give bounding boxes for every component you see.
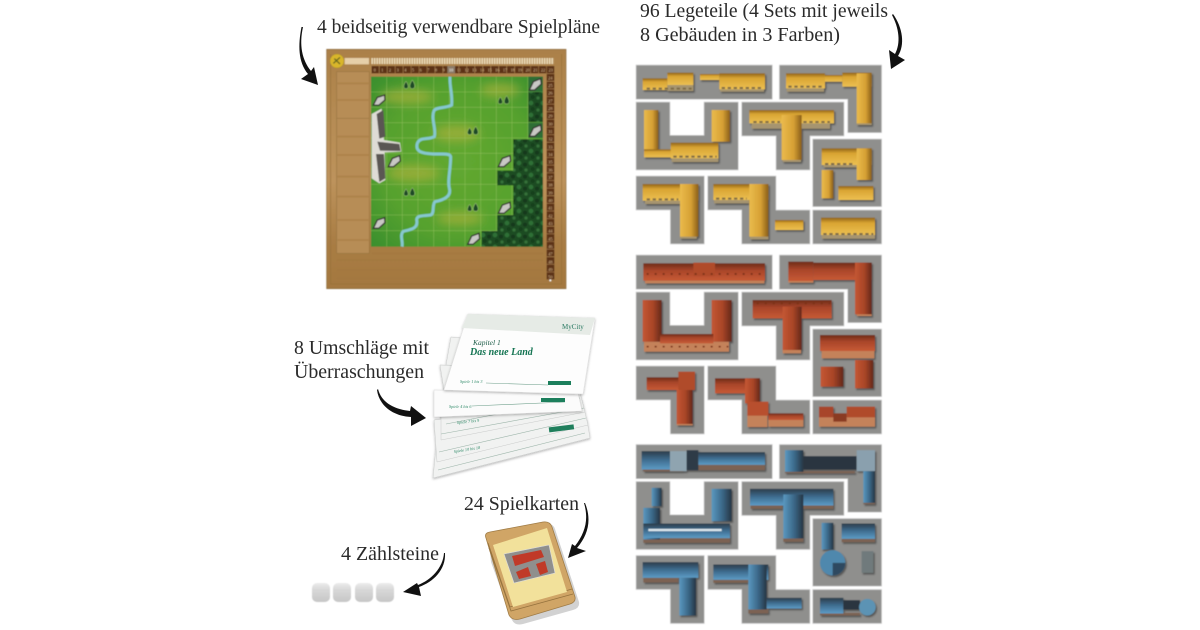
number track top: 19 [518, 67, 522, 72]
number track top: 23 [549, 67, 553, 72]
number track top: 14 [480, 67, 485, 72]
card deck [486, 522, 579, 624]
trees [404, 80, 509, 211]
number track right: 49 [548, 267, 552, 272]
number track right: 24 [548, 75, 553, 80]
tile set: blue buildings [636, 444, 882, 623]
number track top: 8 [435, 67, 437, 72]
lower text labels [453, 418, 481, 454]
mountains [372, 109, 401, 183]
number track top: 10 [449, 67, 453, 72]
arrow: to tiles [889, 14, 905, 69]
number track right: 34 [548, 152, 553, 157]
number track right: 39 [548, 190, 552, 195]
green skyline lower [549, 424, 574, 432]
number track right: 42 [548, 213, 552, 218]
rocks [373, 79, 541, 244]
number track right: 46 [548, 244, 553, 249]
number track top: 11 [457, 67, 461, 72]
number track top: 7 [427, 67, 430, 72]
number track right: 38 [548, 183, 552, 188]
label: envelopes line 1: 8 Umschläge mit [294, 338, 430, 359]
number track top: 3 [397, 67, 399, 72]
top envelope [444, 314, 595, 394]
score dots row [371, 59, 554, 63]
envelopes stack [433, 314, 595, 478]
tile set: red buildings [636, 255, 882, 434]
number track top: 16 [495, 67, 500, 72]
card face [493, 528, 567, 607]
cube 2 [333, 583, 351, 602]
card tile picture [504, 545, 555, 583]
number track right: 26 [548, 91, 553, 96]
arrow: to cards [568, 503, 588, 558]
top envelope: Spiele 1 bis 3 [460, 379, 482, 384]
top envelope: Kapitel 1 [472, 338, 501, 347]
game board [327, 49, 566, 289]
lines on lower envelopes [438, 398, 586, 470]
arrow: to game board [299, 27, 318, 85]
number track top: 13 [472, 67, 476, 72]
number track top [371, 66, 554, 73]
red building roofs [643, 262, 875, 427]
lower text labels: Spiele 7 bis 9 [457, 418, 480, 425]
cube 1 [312, 583, 330, 602]
label: cards: 24 Spielkarten [464, 494, 579, 515]
top envelope: MyCity [562, 323, 584, 331]
arrow: to counters [403, 553, 445, 596]
cube 4 [376, 583, 394, 602]
number track right: 35 [548, 160, 552, 165]
number track top: 22 [541, 67, 545, 72]
cube 3 [355, 583, 373, 602]
number track right: 32 [548, 137, 552, 142]
number track right: 40 [548, 198, 552, 203]
label: counters: 4 Zählsteine [341, 544, 439, 565]
number track right: 28 [548, 106, 552, 111]
arrow: to envelopes [377, 389, 426, 426]
number track right: 48 [548, 259, 552, 264]
number track right: 29 [548, 114, 552, 119]
number track right: 44 [548, 229, 553, 234]
number track right: 45 [548, 236, 552, 241]
board wood frame [327, 49, 566, 289]
number track top: 18 [511, 67, 515, 72]
number track right: 50 [548, 275, 552, 280]
tile set: yellow buildings [636, 65, 882, 244]
label: envelopes line 2: Überraschungen [294, 362, 424, 383]
number track top: 21 [533, 67, 537, 72]
forest [482, 77, 543, 247]
number track top: 15 [488, 67, 492, 72]
number track right: 27 [548, 98, 553, 103]
label: tiles line 1: 96 Legeteile (4 Sets mit jeweils [640, 1, 888, 22]
logo medallion [330, 54, 344, 68]
label: tiles line 2: 8 Gebäuden in 3 Farben) [640, 25, 840, 46]
number track top: 12 [465, 67, 469, 72]
third envelope: Spiele 4 bis 6 [449, 404, 472, 409]
back envelopes [433, 337, 590, 478]
number track right: 36 [548, 167, 553, 172]
label: game boards: 4 beidseitig verwendbare Spielpläne [317, 17, 600, 38]
number track top: 0 [374, 67, 376, 72]
third envelope [434, 390, 582, 417]
green map [371, 77, 543, 247]
number track right: 43 [548, 221, 552, 226]
yellow building roofs [643, 73, 875, 239]
number track right: 41 [548, 206, 552, 211]
number track right: 33 [548, 144, 552, 149]
number track right: 37 [548, 175, 553, 180]
deck stack [488, 524, 579, 624]
number track top: 6 [420, 67, 423, 72]
number track top: 9 [443, 67, 445, 72]
number track top: 2 [389, 67, 391, 72]
number track top: 1 [381, 67, 383, 72]
number track top: 4 [404, 67, 407, 72]
number track right: 47 [548, 252, 553, 257]
lower text labels: Spiele 10 bis 18 [453, 445, 481, 454]
number track right: 31 [548, 129, 552, 134]
blue building roofs [642, 450, 876, 615]
number track top: 5 [412, 67, 414, 72]
river [402, 77, 452, 247]
number track right: 25 [548, 83, 552, 88]
top envelope: Das neue Land [469, 347, 534, 358]
number track top: 20 [526, 67, 530, 72]
number track right: 30 [548, 121, 552, 126]
number track right [547, 73, 554, 281]
number track top: 17 [503, 67, 508, 72]
counters: four cubes [312, 583, 394, 602]
